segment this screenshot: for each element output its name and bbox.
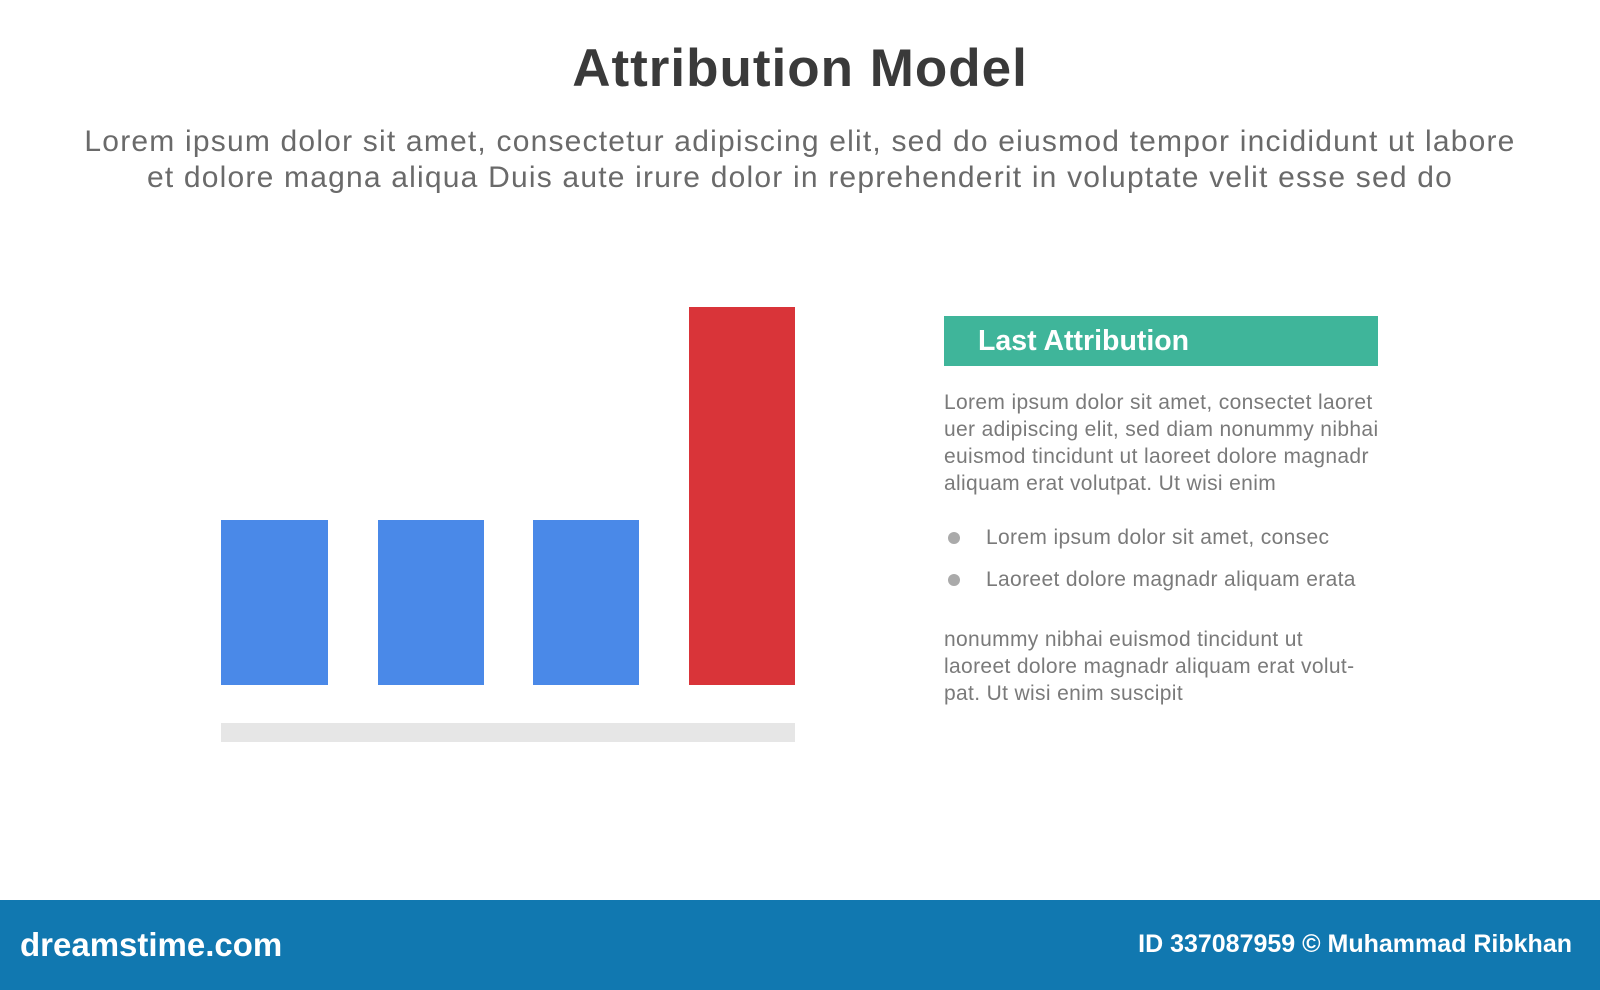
header xyxy=(944,316,1378,366)
bar 3 xyxy=(533,520,639,685)
subtitle: et dolore magna aliqua Duis aute irure dolor in reprehenderit in voluptate velit esse sed do xyxy=(147,161,1453,194)
subtitle: Lorem ipsum dolor sit amet, consectetur adipiscing elit, sed do eiusmod tempor incididunt ut labore xyxy=(84,125,1516,158)
paragraph 1: euismod tincidunt ut laoreet dolore magnadr xyxy=(944,445,1369,468)
bar 2 xyxy=(378,520,484,685)
header: Last Attribution xyxy=(978,325,1189,357)
footer id: ID 337087959 © Muhammad Ribkhan xyxy=(1138,930,1572,958)
paragraph 2: pat. Ut wisi enim suscipit xyxy=(944,682,1183,705)
footer xyxy=(0,900,1600,990)
paragraph 2 xyxy=(944,628,1354,705)
baseline xyxy=(221,723,795,742)
paragraph 2: laoreet dolore magnadr aliquam erat volut- xyxy=(944,655,1354,678)
bar 1 xyxy=(221,520,328,685)
subtitle xyxy=(84,125,1516,194)
bullet 1: Lorem ipsum dolor sit amet, consec xyxy=(986,526,1329,549)
title: Attribution Model xyxy=(572,39,1028,98)
paragraph 1: Lorem ipsum dolor sit amet, consectet laoret xyxy=(944,391,1373,414)
paragraph 1 xyxy=(944,391,1378,495)
paragraph 1: aliquam erat volutpat. Ut wisi enim xyxy=(944,472,1276,495)
footer logo: dreamstime.com xyxy=(20,926,282,963)
paragraph 2: nonummy nibhai euismod tincidunt ut xyxy=(944,628,1303,651)
bar chart xyxy=(221,307,795,742)
paragraph 1: uer adipiscing elit, sed diam nonummy nibhai xyxy=(944,418,1378,441)
bar 4 red xyxy=(689,307,795,685)
bullet 2: Laoreet dolore magnadr aliquam erata xyxy=(986,568,1356,591)
